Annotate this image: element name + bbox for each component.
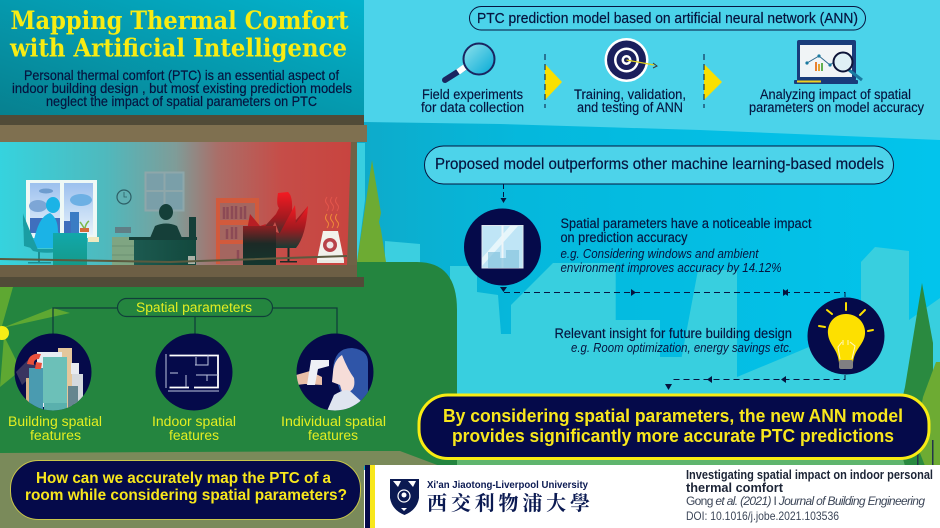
spatial parameters pill: Spatial parameters xyxy=(136,300,252,315)
icon: laptop with chart xyxy=(794,40,862,84)
spatial parameters pill xyxy=(118,298,272,316)
step 2 label: and testing of ANN xyxy=(577,100,683,115)
icon: magnifying glass xyxy=(445,44,494,80)
background: left header band xyxy=(0,0,364,116)
finding 1 text: Spatial parameters have a noticeable impact xyxy=(560,216,812,231)
trees right xyxy=(895,283,940,466)
arrow: bulb to conclusion xyxy=(665,375,845,390)
floor underside xyxy=(0,277,364,287)
heading pill: outperforms: Proposed model outperforms other machine learning-based models xyxy=(435,156,884,173)
roof band xyxy=(0,115,364,125)
conclusion pill xyxy=(419,395,929,458)
icon: floor plan xyxy=(156,334,232,410)
tree near building xyxy=(357,160,386,262)
title: Mapping Thermal Comfort xyxy=(10,6,349,35)
floor xyxy=(0,265,357,278)
heater xyxy=(317,197,344,263)
label: individual spatial features: Individual spatial xyxy=(281,414,386,429)
intro text: neglect the impact of spatial parameters on PTC xyxy=(46,93,317,109)
question pill: room while considering spatial parameters? xyxy=(25,487,347,504)
step 3 label: Analyzing impact of spatial xyxy=(760,87,911,102)
conclusion pill: provides significantly more accurate PTC predictions xyxy=(452,425,894,446)
citation xyxy=(686,468,933,523)
label: building spatial features: features xyxy=(30,428,81,443)
heading pill: outperforms xyxy=(424,146,894,184)
intro text: indoor building design , but most existing prediction models xyxy=(12,80,352,96)
label: indoor spatial features: Indoor spatial xyxy=(152,414,236,429)
title: with Artificial Intelligence xyxy=(9,34,347,62)
title xyxy=(9,6,349,62)
mid window xyxy=(145,172,184,211)
finding 2 text xyxy=(554,326,792,355)
heading pill: ANN model: PTC prediction model based on artificial neural network (ANN) xyxy=(477,11,858,27)
arrow: pill to window xyxy=(500,184,506,203)
XJTLU crest xyxy=(390,479,419,515)
intro text: Personal thermal comfort (PTC) is an essential aspect of xyxy=(24,67,339,83)
window with city xyxy=(26,180,99,242)
heading pill: ANN model xyxy=(470,6,866,30)
arrow: step 2 to 3 xyxy=(704,54,722,108)
step 1 label xyxy=(421,87,524,115)
clock xyxy=(117,190,131,204)
conclusion pill: By considering spatial parameters, the new ANN model xyxy=(443,405,903,426)
label: individual spatial features: features xyxy=(308,428,358,443)
olive band xyxy=(0,451,364,528)
step 3 label: parameters on model accuracy xyxy=(749,100,924,115)
label: building spatial features: Building spatial xyxy=(8,414,102,429)
label: indoor spatial features xyxy=(152,414,236,443)
finding 2 text: e.g. Room optimization, energy savings etc. xyxy=(571,340,792,355)
citation: DOI: 10.1016/j.jobe.2021.103536 xyxy=(686,509,839,523)
arrow: window to bulb xyxy=(500,287,845,297)
bookshelf xyxy=(216,198,259,264)
icon: target xyxy=(604,38,657,82)
cool person at desk xyxy=(23,197,87,265)
step 1 label: Field experiments xyxy=(422,87,523,102)
roof beam xyxy=(0,125,367,142)
background: green hill xyxy=(0,262,940,466)
question pill: How can we accurately map the PTC of a xyxy=(36,470,331,487)
question pill xyxy=(10,460,360,520)
label: building spatial features xyxy=(8,414,102,443)
finding 1 text: e.g. Considering windows and ambient xyxy=(560,246,760,261)
icon: light bulb xyxy=(808,298,884,374)
arrow: step 1 to 2 xyxy=(545,54,562,108)
citation: thermal comfort xyxy=(686,481,784,495)
footer panel xyxy=(365,465,940,528)
intro text xyxy=(12,67,352,109)
step 2 label: Training, validation, xyxy=(574,87,686,102)
right wall xyxy=(347,142,357,266)
hot person at desk xyxy=(243,192,308,265)
cabinet xyxy=(112,227,134,265)
label: individual spatial features xyxy=(281,414,386,443)
finding 1 text xyxy=(560,216,812,275)
spatial parameters connector lines xyxy=(53,308,337,334)
finding 2 text: Relevant insight for future building design xyxy=(554,326,792,341)
label: indoor spatial features: features xyxy=(169,428,219,443)
middle person at desk xyxy=(129,204,197,265)
university name: Xi'an Jiaotong-Liverpool University xyxy=(427,479,588,491)
icon: buildings xyxy=(14,334,92,413)
finding 1 text: environment improves accuracy by 14.12% xyxy=(560,260,782,275)
floor line xyxy=(0,255,347,263)
sun xyxy=(0,287,70,387)
finding 1 text: on prediction accuracy xyxy=(560,230,688,245)
step 3 label xyxy=(749,87,924,115)
icon: window xyxy=(464,208,541,286)
step 1 label: for data collection xyxy=(421,100,524,115)
background: right sky xyxy=(340,0,940,470)
building section xyxy=(0,115,367,287)
university name: 西交利物浦大學 xyxy=(427,487,590,516)
citation: Gong et al. (2021) I Journal of Building Engineering xyxy=(686,494,925,508)
icon: person with thermometer xyxy=(296,334,374,412)
room interior xyxy=(0,142,352,266)
step 2 label xyxy=(574,87,686,115)
